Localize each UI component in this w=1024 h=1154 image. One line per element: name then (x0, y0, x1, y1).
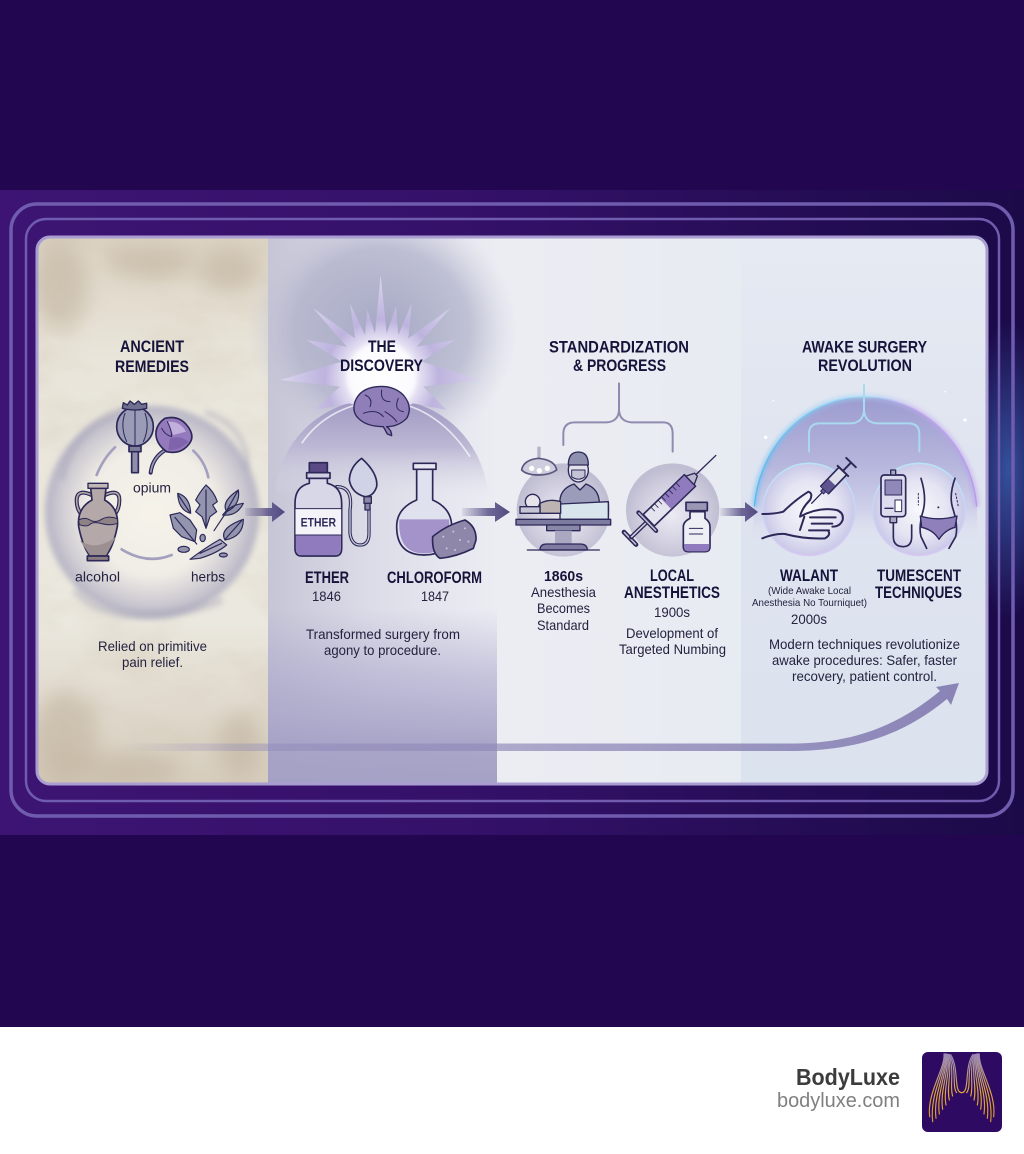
caption: modern techniques: awake procedures: Safer, faster (772, 652, 957, 668)
blue edge glow (966, 320, 1024, 620)
icons: standardization (516, 383, 725, 557)
section: the discovery (275, 275, 488, 658)
growth arrow sweep (120, 683, 959, 751)
icons: awake surgery (752, 385, 978, 555)
label: opium: opium (133, 480, 171, 496)
label: walant: Anesthesia No Tourniquet) (752, 597, 867, 609)
caption: primitive pain relief: pain relief. (122, 654, 183, 670)
label: 1860s anesthesia becomes standard: Becomes (537, 600, 590, 616)
icon: pump (881, 470, 912, 547)
label: local anesthetics 1900s: ANESTHETICS (624, 584, 720, 602)
dome highlight (302, 402, 470, 457)
icon: surgeon (560, 452, 599, 505)
disc left (763, 463, 855, 555)
heading: standardization (549, 338, 689, 375)
footer (0, 1027, 1024, 1154)
starburst (280, 275, 480, 417)
caption: modern techniques (769, 636, 960, 684)
icon: poppy flower (151, 417, 192, 473)
icon: patient on table (516, 494, 611, 550)
caption: transformed surgery: Transformed surgery from (306, 626, 460, 642)
brand url: bodyluxe.com (777, 1090, 900, 1112)
label: ether 1846 (305, 569, 349, 604)
icon: oxygen mask (349, 458, 377, 510)
label: chloroform 1847: CHLOROFORM (387, 569, 482, 587)
panel: awake surgery background (741, 237, 987, 784)
arrow: standardization to awake surgery (720, 502, 758, 522)
section: standardization and progress (516, 338, 726, 657)
label: tumescent techniques: TUMESCENT (877, 567, 961, 585)
icon: surgical lamp (522, 447, 557, 475)
label: 1860s anesthesia becomes standard: Standard (537, 617, 589, 633)
panel: the discovery background (268, 237, 497, 784)
bracket (563, 383, 673, 452)
heading: ancient remedies: ANCIENT (120, 338, 184, 356)
icon: syringe (621, 446, 725, 547)
label: local anesthetics 1900s (619, 567, 726, 657)
label: alcohol: alcohol (75, 568, 120, 584)
section: ancient remedies (45, 338, 259, 670)
caption: modern techniques: recovery, patient control. (792, 668, 937, 684)
icon: ether bottle (295, 463, 369, 556)
label: tumescent techniques (875, 567, 962, 602)
disc right (626, 463, 719, 557)
caption: primitive pain relief (98, 638, 207, 670)
logo (922, 1052, 1002, 1132)
label: chloroform 1847 (387, 569, 482, 604)
label: walant: WALANT (780, 567, 838, 585)
icon: brain (354, 386, 409, 436)
label: local anesthetics 1900s: LOCAL (650, 567, 694, 585)
icon: vial (683, 502, 710, 552)
heading: the discovery: DISCOVERY (340, 357, 423, 375)
caption: transformed surgery (306, 626, 460, 658)
bracket (809, 385, 919, 452)
heading: the discovery (340, 338, 423, 375)
smoke circle (45, 406, 259, 618)
icon: hand (762, 492, 843, 538)
glowing dome (752, 391, 978, 543)
label: 1860s anesthesia becomes standard: 1860s (544, 568, 583, 585)
label: ether 1846: ETHER (305, 569, 349, 587)
caption: primitive pain relief: Relied on primitive (98, 638, 207, 654)
label: tumescent techniques: TECHNIQUES (875, 584, 962, 602)
label: walant: (Wide Awake Local (768, 585, 851, 597)
heading: awake surgery revolution (802, 338, 927, 375)
icon: chloroform flask (397, 463, 452, 555)
label: walant (752, 567, 867, 627)
disc left (517, 463, 610, 557)
panel: standardization background (497, 237, 741, 784)
label: chloroform 1847: 1847 (421, 588, 449, 604)
ring arcs (97, 447, 208, 559)
heading: the discovery: THE (368, 338, 396, 356)
icon: torso (918, 478, 958, 548)
heading: awake surgery revolution: REVOLUTION (818, 357, 912, 375)
icon: injection syringe (806, 457, 856, 508)
icon: sponge (433, 520, 476, 558)
icon: ether bottle: ETHER (301, 516, 336, 530)
label: 1860s anesthesia becomes standard (531, 568, 596, 633)
heading: awake surgery revolution: AWAKE SURGERY (802, 338, 927, 356)
icon: amphora (77, 483, 119, 561)
icon: herbs (170, 485, 243, 559)
burst glow (262, 238, 504, 422)
panel: ancient remedies background (32, 237, 268, 790)
label: local anesthetics 1900s: Development of (626, 625, 718, 641)
icons: the discovery (275, 275, 488, 558)
heading: ancient remedies (115, 338, 189, 376)
heading: ancient remedies: REMEDIES (115, 358, 189, 376)
arrow: discovery to standardization (462, 502, 510, 522)
arrow: remedies to discovery (245, 502, 285, 522)
framed band (0, 190, 1024, 835)
heading: standardization: STANDARDIZATION (549, 338, 689, 356)
icon: poppy pod (117, 401, 153, 473)
label: local anesthetics 1900s: Targeted Numbing (619, 641, 726, 657)
icons: ancient remedies (77, 401, 243, 561)
brand name: BodyLuxe (796, 1064, 900, 1090)
label: ether 1846: 1846 (312, 588, 341, 604)
section: awake surgery revolution (752, 338, 978, 684)
caption: modern techniques: Modern techniques revolutionize (769, 636, 960, 652)
disc right (873, 463, 965, 555)
label: herbs: herbs (191, 568, 225, 584)
infographic card (32, 205, 987, 790)
label: walant: 2000s (791, 611, 827, 627)
dome (275, 398, 488, 497)
label: local anesthetics 1900s: 1900s (654, 604, 690, 620)
heading: standardization: & PROGRESS (573, 357, 666, 375)
caption: transformed surgery: agony to procedure. (324, 642, 441, 658)
label: 1860s anesthesia becomes standard: Anesthesia (531, 584, 596, 600)
